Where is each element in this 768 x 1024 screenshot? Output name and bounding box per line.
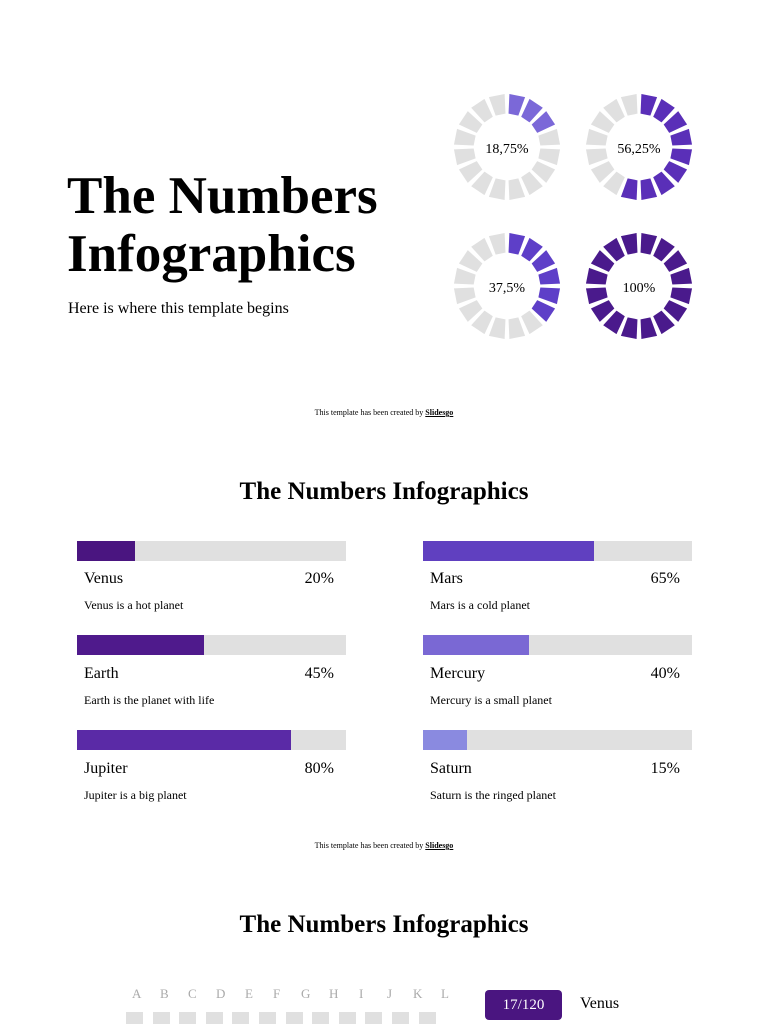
letter grid: C: [188, 986, 197, 1001]
bar: Earth: 45%: [305, 665, 334, 682]
bar: Earth: Earth is the planet with life: [84, 693, 214, 707]
bar: Saturn: 15%: [651, 760, 680, 777]
donut 37,5%: 37,5%: [489, 281, 525, 296]
letter grid: [126, 986, 449, 1024]
letter grid: B: [160, 986, 169, 1001]
bar: Mars: [423, 541, 692, 612]
donut 100%: 100%: [623, 281, 656, 296]
bar: Mars: Mars: [430, 570, 463, 587]
label Venus: Venus: [580, 995, 619, 1012]
title: [67, 167, 378, 283]
bar: Mars: 65%: [651, 570, 680, 587]
bar: Mercury: Mercury is a small planet: [430, 693, 552, 707]
bar: Mercury: 40%: [651, 665, 680, 682]
bar: Venus: Venus is a hot planet: [84, 598, 183, 612]
bar: Venus: Venus: [84, 570, 123, 587]
title: The Numbers: [67, 167, 378, 225]
letter grid: G: [301, 986, 310, 1001]
letter grid: L: [441, 986, 449, 1001]
bar: Venus: [77, 541, 346, 612]
credit 1: This template has been created by Slidesgo: [315, 408, 453, 417]
badge 17/120: [485, 990, 562, 1020]
bar: Jupiter: 80%: [305, 760, 334, 777]
letter grid: J: [387, 986, 392, 1001]
bar: Earth: Earth: [84, 665, 119, 682]
bar: Earth: [77, 635, 346, 707]
bar: Venus: 20%: [305, 570, 334, 587]
bar: Mercury: [423, 635, 692, 707]
subtitle: Here is where this template begins: [68, 300, 289, 317]
bar: Mercury: Mercury: [430, 665, 485, 682]
letter grid: I: [359, 986, 363, 1001]
title: Infographics: [67, 225, 356, 283]
donut 37,5%: [451, 230, 563, 342]
donut charts: [454, 94, 692, 339]
letter grid: E: [245, 986, 253, 1001]
heading 2: The Numbers Infographics: [240, 478, 528, 505]
bar: Saturn: [423, 730, 692, 802]
heading 3: The Numbers Infographics: [240, 911, 528, 938]
letter grid: F: [273, 986, 280, 1001]
bar: Saturn: Saturn is the ringed planet: [430, 788, 556, 802]
letter grid: K: [413, 986, 422, 1001]
bar: Mars: Mars is a cold planet: [430, 598, 530, 612]
bar: Jupiter: Jupiter: [84, 760, 128, 777]
donut 18,75%: 18,75%: [485, 142, 529, 157]
letter grid: H: [329, 986, 338, 1001]
letter grid: D: [216, 986, 225, 1001]
bar: Jupiter: [77, 730, 346, 802]
donut 56,25%: [583, 91, 695, 203]
badge 17/120: 17/120: [503, 997, 544, 1013]
donut 18,75%: [451, 91, 563, 203]
letter grid: A: [132, 986, 141, 1001]
bar: Saturn: Saturn: [430, 760, 472, 777]
donut 100%: [583, 230, 695, 342]
bar: Jupiter: Jupiter is a big planet: [84, 788, 187, 802]
credit 2: This template has been created by Slidesgo: [315, 841, 453, 850]
donut 56,25%: 56,25%: [617, 142, 661, 157]
